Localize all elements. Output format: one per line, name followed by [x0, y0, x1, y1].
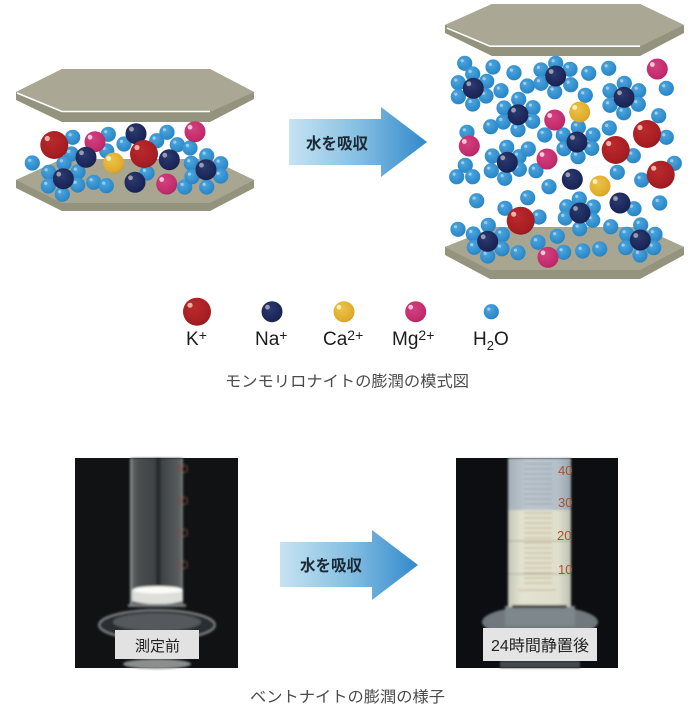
legend item: Mg2+	[392, 301, 434, 350]
legend item: Mg2+: 2+	[418, 327, 434, 343]
legend item: Na+	[255, 301, 287, 350]
scale numbers: 20	[557, 528, 571, 543]
label: after 24 hours of standing: 24時間静置後	[491, 637, 589, 655]
legend item: Na+: +	[279, 327, 287, 343]
legend item: H2O: O	[494, 329, 509, 350]
top clay plate	[16, 69, 254, 122]
legend item: Ca2+	[323, 301, 363, 350]
top clay plate	[445, 4, 684, 56]
legend item: H2O: H	[473, 329, 487, 350]
upper water column	[508, 458, 571, 510]
legend item: K+: K	[186, 329, 199, 350]
legend item: Ca2+: 2+	[347, 327, 363, 343]
ions	[40, 121, 216, 194]
legend item: Ca2+: Ca	[323, 329, 347, 350]
scale numbers: 10	[558, 562, 572, 577]
cylinder base line	[512, 605, 567, 608]
scale numbers: 30	[558, 495, 572, 510]
scale numbers: 40	[558, 463, 572, 478]
legend item: Mg2+: Mg	[392, 329, 418, 350]
caption: bentonite swelling: ベントナイトの膨潤の様子	[250, 688, 445, 706]
swollen bentonite	[508, 510, 571, 607]
caption: swelling schematic: モンモリロナイトの膨潤の模式図	[225, 372, 469, 390]
scale numbers: 20	[175, 526, 189, 540]
legend	[183, 298, 509, 353]
legend item: Na+: Na	[255, 329, 279, 350]
label: before measurement: 測定前	[135, 638, 180, 655]
scale numbers: 30	[175, 494, 189, 508]
label: after 24 hours of standing	[483, 628, 597, 661]
glass foot	[99, 610, 215, 640]
scale numbers: 10	[175, 558, 189, 572]
bottom clay plate	[16, 159, 254, 211]
scale numbers	[175, 462, 189, 572]
legend item: H2O	[473, 304, 509, 353]
graduation lines	[518, 513, 556, 590]
scale numbers	[557, 463, 572, 577]
arrow: water absorption (diagram)	[289, 107, 427, 177]
bottom clay plate	[445, 227, 684, 279]
water molecules	[25, 125, 228, 202]
panel: montmorillonite after swelling	[445, 4, 684, 279]
white tablet	[132, 586, 183, 604]
legend item: H2O: 2	[487, 338, 494, 353]
panel: montmorillonite before swelling	[16, 69, 254, 211]
label: before measurement	[115, 630, 199, 659]
legend item: K+	[183, 298, 211, 350]
arrow: water absorption (diagram): 水を吸収	[306, 135, 368, 153]
arrow: water absorption (photos): 水を吸収	[300, 557, 362, 575]
photo: cylinder after 24 hours	[456, 458, 618, 668]
glass cylinder	[130, 458, 183, 606]
water molecules	[449, 56, 682, 264]
legend item: K+: +	[199, 327, 207, 343]
glass foot	[482, 606, 598, 638]
ions	[459, 58, 675, 268]
scale numbers: 40	[175, 462, 189, 476]
photo: cylinder before measurement	[75, 458, 238, 669]
arrow: water absorption (photos)	[280, 530, 418, 600]
